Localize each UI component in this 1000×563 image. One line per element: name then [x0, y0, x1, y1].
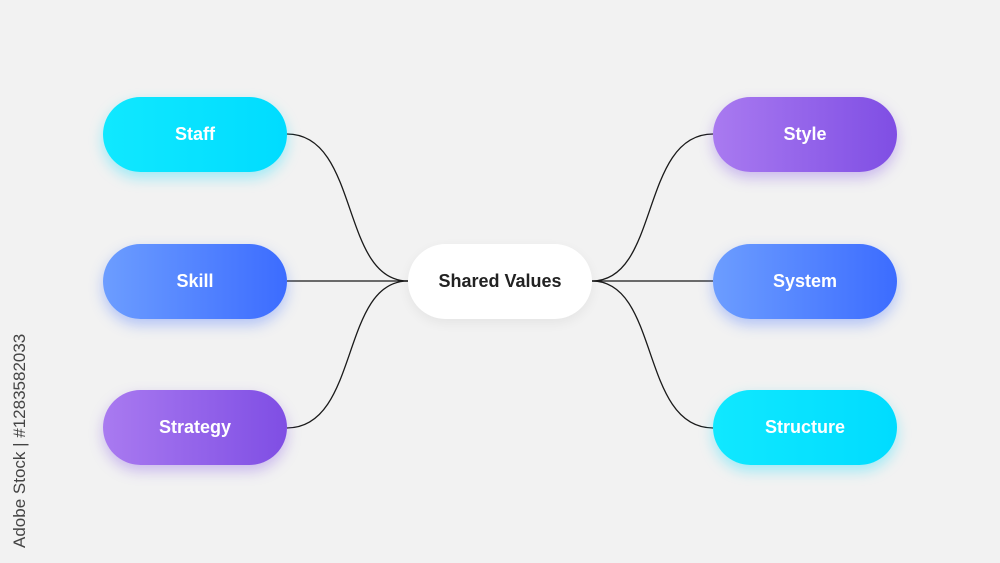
- pill: Structure: Structure: [765, 417, 845, 437]
- pill: Strategy: [103, 390, 287, 465]
- pill: Skill: [103, 244, 287, 319]
- center: Shared Values: Shared Values: [438, 271, 562, 291]
- pill: Skill: Skill: [176, 271, 214, 291]
- pill: Staff: Staff: [175, 124, 215, 144]
- center: Shared Values: [408, 244, 592, 319]
- pill: Style: Style: [783, 124, 827, 144]
- pill: Strategy: Strategy: [159, 417, 231, 437]
- pill: System: System: [773, 271, 837, 291]
- pill: System: [713, 244, 897, 319]
- pill: Style: [713, 97, 897, 172]
- watermark id text: Adobe Stock | #1283582033: [10, 334, 29, 548]
- pill: Staff: [103, 97, 287, 172]
- pill: Structure: [713, 390, 897, 465]
